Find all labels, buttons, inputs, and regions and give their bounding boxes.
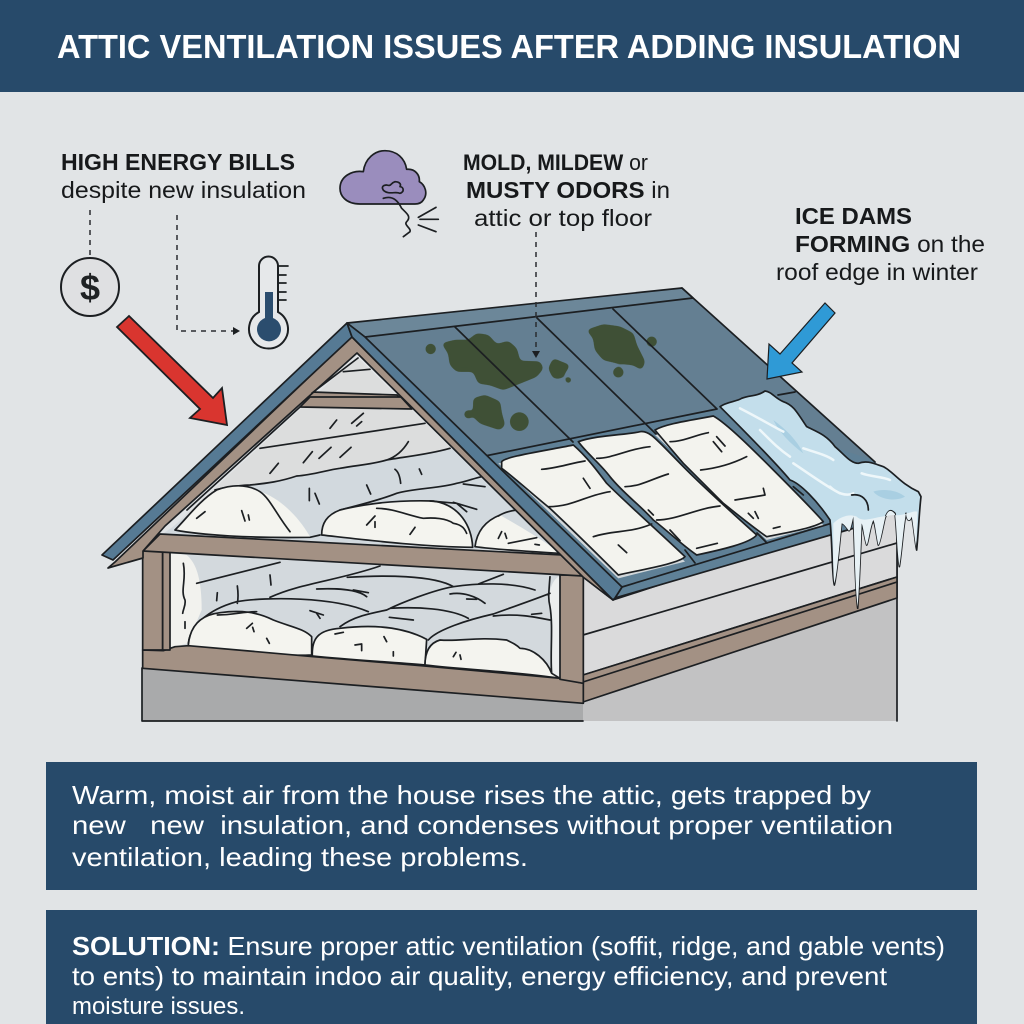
ice dams blue arrow — [767, 303, 835, 379]
panel: explanation: ventilation, leading these problems. — [72, 842, 528, 872]
lower brown framing — [143, 550, 583, 703]
mold pointer — [535, 232, 537, 352]
base wall — [142, 507, 897, 721]
panel: solution: moisture issues. — [72, 993, 245, 1020]
icon: musty cloud — [340, 151, 438, 237]
callout: ice dams: FORMING on the — [795, 231, 985, 257]
side siding — [583, 507, 897, 702]
house illustration — [102, 232, 921, 721]
callout: mold, mildew or musty odors: MOLD, MILDEW or — [463, 150, 648, 175]
callout: high energy bills — [61, 149, 306, 203]
title banner: ATTIC VENTILATION ISSUES AFTER ADDING INSULATION — [57, 28, 961, 65]
panel: solution: to ents) to maintain indoo air quality, energy efficiency, and prevent — [72, 961, 888, 991]
roof insulation batts — [498, 416, 823, 578]
icon: dollar coin: $ — [80, 267, 100, 308]
icon: red arrow — [117, 316, 227, 425]
ice dam — [720, 391, 921, 608]
roof edge strips — [102, 323, 622, 600]
panel: solution — [46, 910, 977, 1024]
mold patches — [425, 324, 657, 431]
roof panel seams — [455, 288, 875, 563]
callout: high energy bills: despite new insulation — [61, 177, 306, 203]
callout: high energy bills: HIGH ENERGY BILLS — [61, 149, 295, 175]
roof plane — [347, 288, 905, 598]
callout: mold, mildew or musty odors: attic or top floor — [474, 205, 652, 231]
callout: mold, mildew or musty odors: MUSTY ODORS in — [466, 177, 670, 203]
panel: solution: SOLUTION: Ensure proper attic ventilation (soffit, ridge, and gable vents) — [72, 931, 945, 961]
callout: mold, mildew or musty odors — [463, 150, 670, 231]
panel: explanation: new new insulation, and condenses without proper ventilation — [72, 810, 893, 840]
icon: thermometer — [177, 215, 288, 349]
lower attic cavity — [163, 553, 560, 678]
panel: explanation: Warm, moist air from the house rises the attic, gets trapped by — [72, 780, 871, 810]
title banner — [0, 0, 1024, 92]
upper attic cavity — [163, 357, 563, 556]
panel: explanation — [46, 762, 977, 890]
icon: dollar coin — [61, 210, 119, 316]
callout: ice dams: ICE DAMS — [795, 203, 912, 229]
callout: ice dams — [776, 203, 985, 285]
callout: ice dams: roof edge in winter — [776, 259, 978, 285]
upper brown framing — [108, 337, 613, 600]
